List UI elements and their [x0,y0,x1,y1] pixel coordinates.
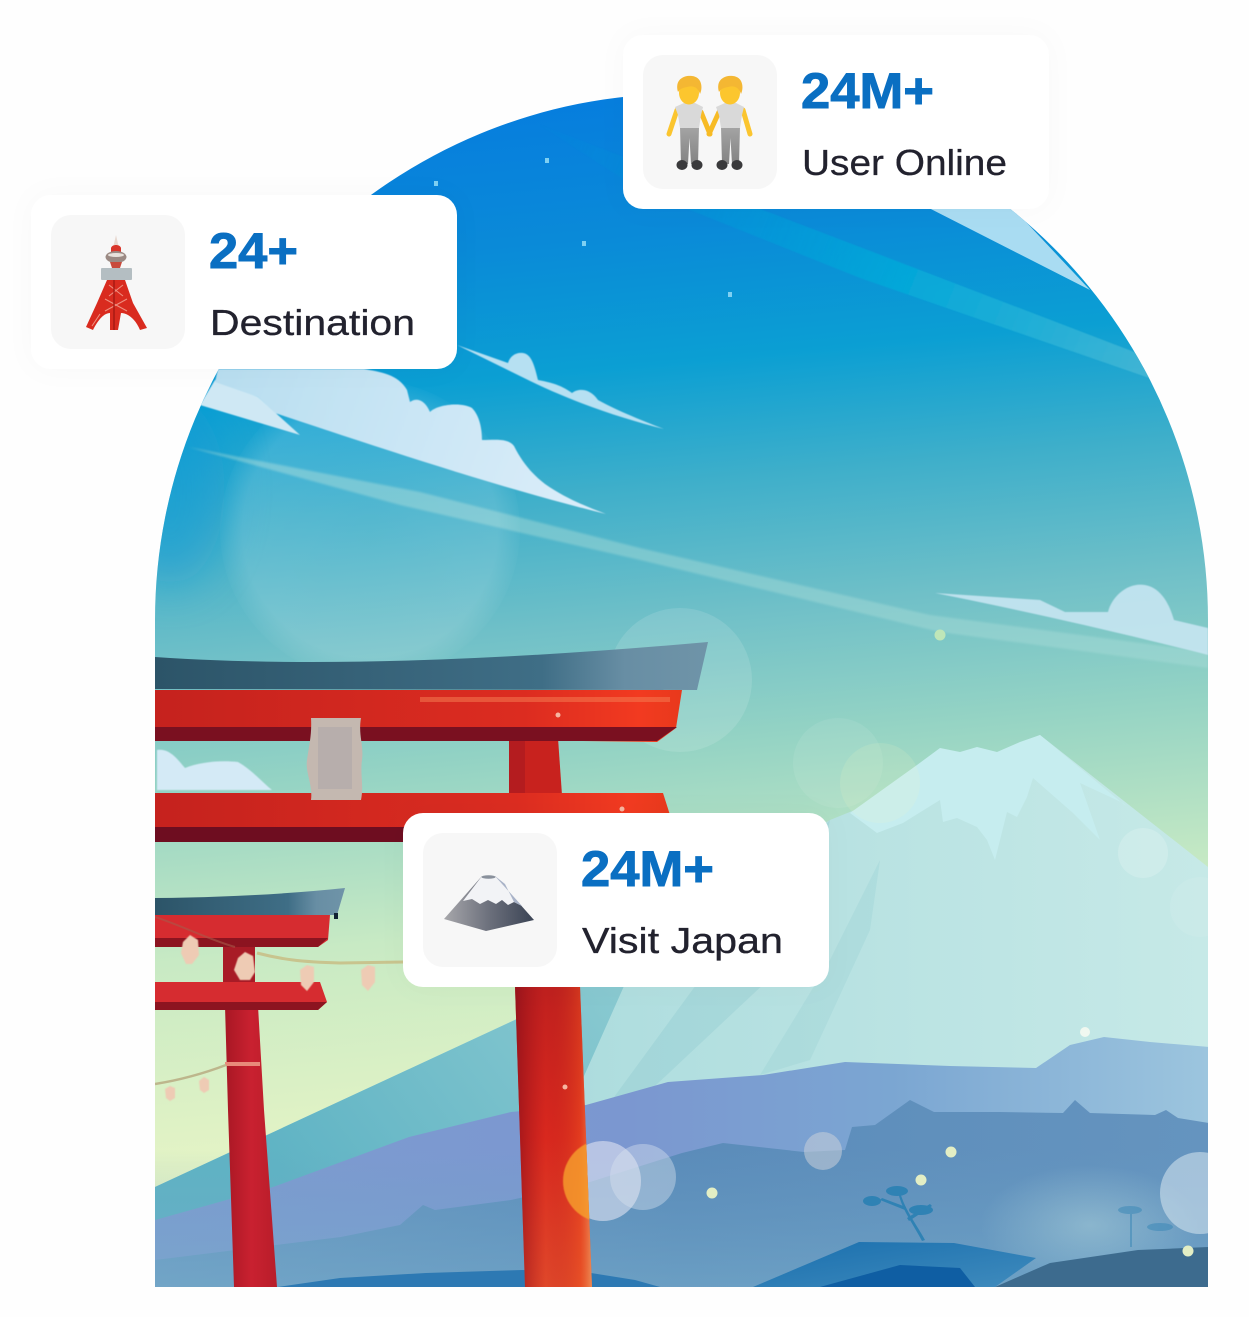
lens flare circles [565,743,1240,1234]
Mount Fuji [155,735,1208,1220]
small tree [863,1186,1173,1247]
card: Visit Japan [403,813,829,987]
distant mountain band [155,1037,1208,1260]
sky [155,90,1208,1287]
stat label: User Online [802,142,1007,183]
bokeh circles [224,388,752,752]
icon tile: people holding hands [643,55,777,189]
mist over range [155,1165,1208,1287]
stat value: 24M+ [581,841,714,897]
icon tile: Tokyo tower [51,215,185,349]
person left [669,76,710,170]
stars [434,158,732,297]
glowing dots [706,630,1194,1256]
stat value: 24+ [209,223,298,279]
card: User Online [623,35,1049,209]
person right [709,76,750,170]
stat label: Destination [210,302,415,343]
icon tile: Mount Fuji [423,833,557,967]
darker mountain range [155,1100,1209,1287]
clouds [157,345,1208,790]
foreground hills [278,1242,1209,1287]
card: Destination [31,195,457,369]
stat label: Visit Japan [582,920,783,961]
sky streaks [156,167,1208,667]
small torii gate [155,888,404,1287]
stat value: 24M+ [801,63,934,119]
large torii gate [155,642,708,1287]
